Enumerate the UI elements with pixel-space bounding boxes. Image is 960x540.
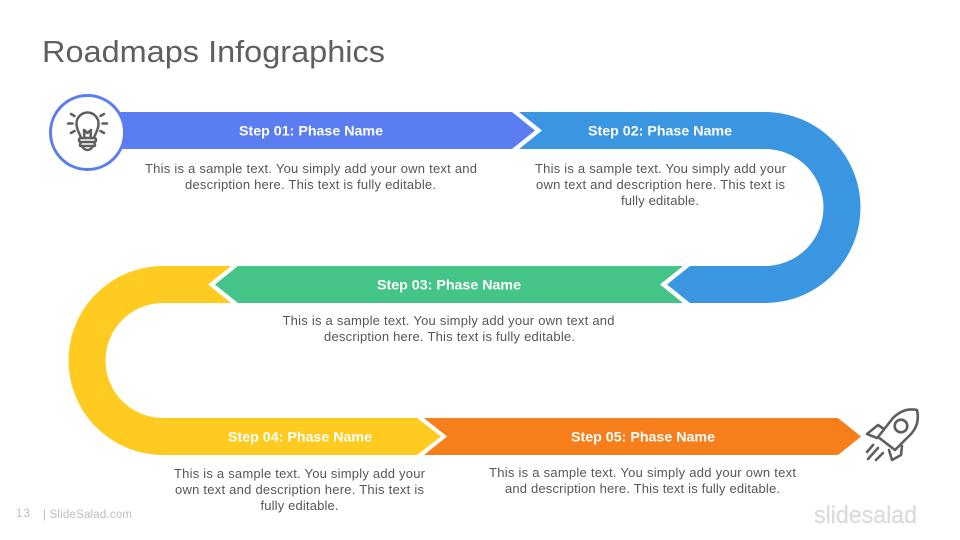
step 1 description: [145, 161, 477, 192]
step 2 description: [535, 161, 787, 208]
step 1 description: description here. This text is fully editable.: [185, 177, 436, 192]
step 4: curved arrow band: [69, 266, 441, 455]
step 5: arrow band: [424, 418, 861, 455]
step 1 heading: Step 01: Phase Name: [239, 122, 383, 138]
step 4 description: [174, 466, 426, 513]
step 5 description: and description here. This text is fully editable.: [505, 481, 780, 496]
step 4 description: This is a sample text. You simply add your: [174, 466, 426, 481]
step 2 description: fully editable.: [621, 193, 699, 208]
step 5 description: This is a sample text. You simply add your own text: [489, 465, 796, 480]
icon: rocket: [867, 409, 918, 460]
page number: 13: [16, 508, 30, 520]
step 3 description: description here. This text is fully editable.: [324, 329, 575, 344]
icon: light bulb in circle: [50, 96, 124, 170]
step 2 description: own text and description here. This text is: [536, 177, 786, 192]
step 2 description: This is a sample text. You simply add your: [535, 161, 787, 176]
step 4 description: own text and description here. This text is: [175, 482, 424, 497]
step 4 heading: Step 04: Phase Name: [228, 428, 372, 444]
step 4 description: fully editable.: [260, 498, 338, 513]
step 2: curved arrow band: [519, 112, 860, 303]
step 3 heading: Step 03: Phase Name: [377, 276, 521, 292]
step 1 description: This is a sample text. You simply add your own text and: [145, 161, 477, 176]
step 1: arrow band: [115, 112, 535, 149]
step 2 heading: Step 02: Phase Name: [588, 122, 732, 138]
step 5 heading: Step 05: Phase Name: [571, 428, 715, 444]
footer site name: | SlideSalad.com: [43, 509, 132, 521]
title: Roadmaps Infographics: [42, 34, 385, 69]
step 3: arrow band: [215, 266, 683, 303]
step 5 description: [489, 465, 796, 496]
footer logo: slidesalad: [814, 502, 917, 529]
step 3 description: This is a sample text. You simply add your own text and: [282, 313, 614, 328]
step 3 description: [282, 313, 614, 344]
